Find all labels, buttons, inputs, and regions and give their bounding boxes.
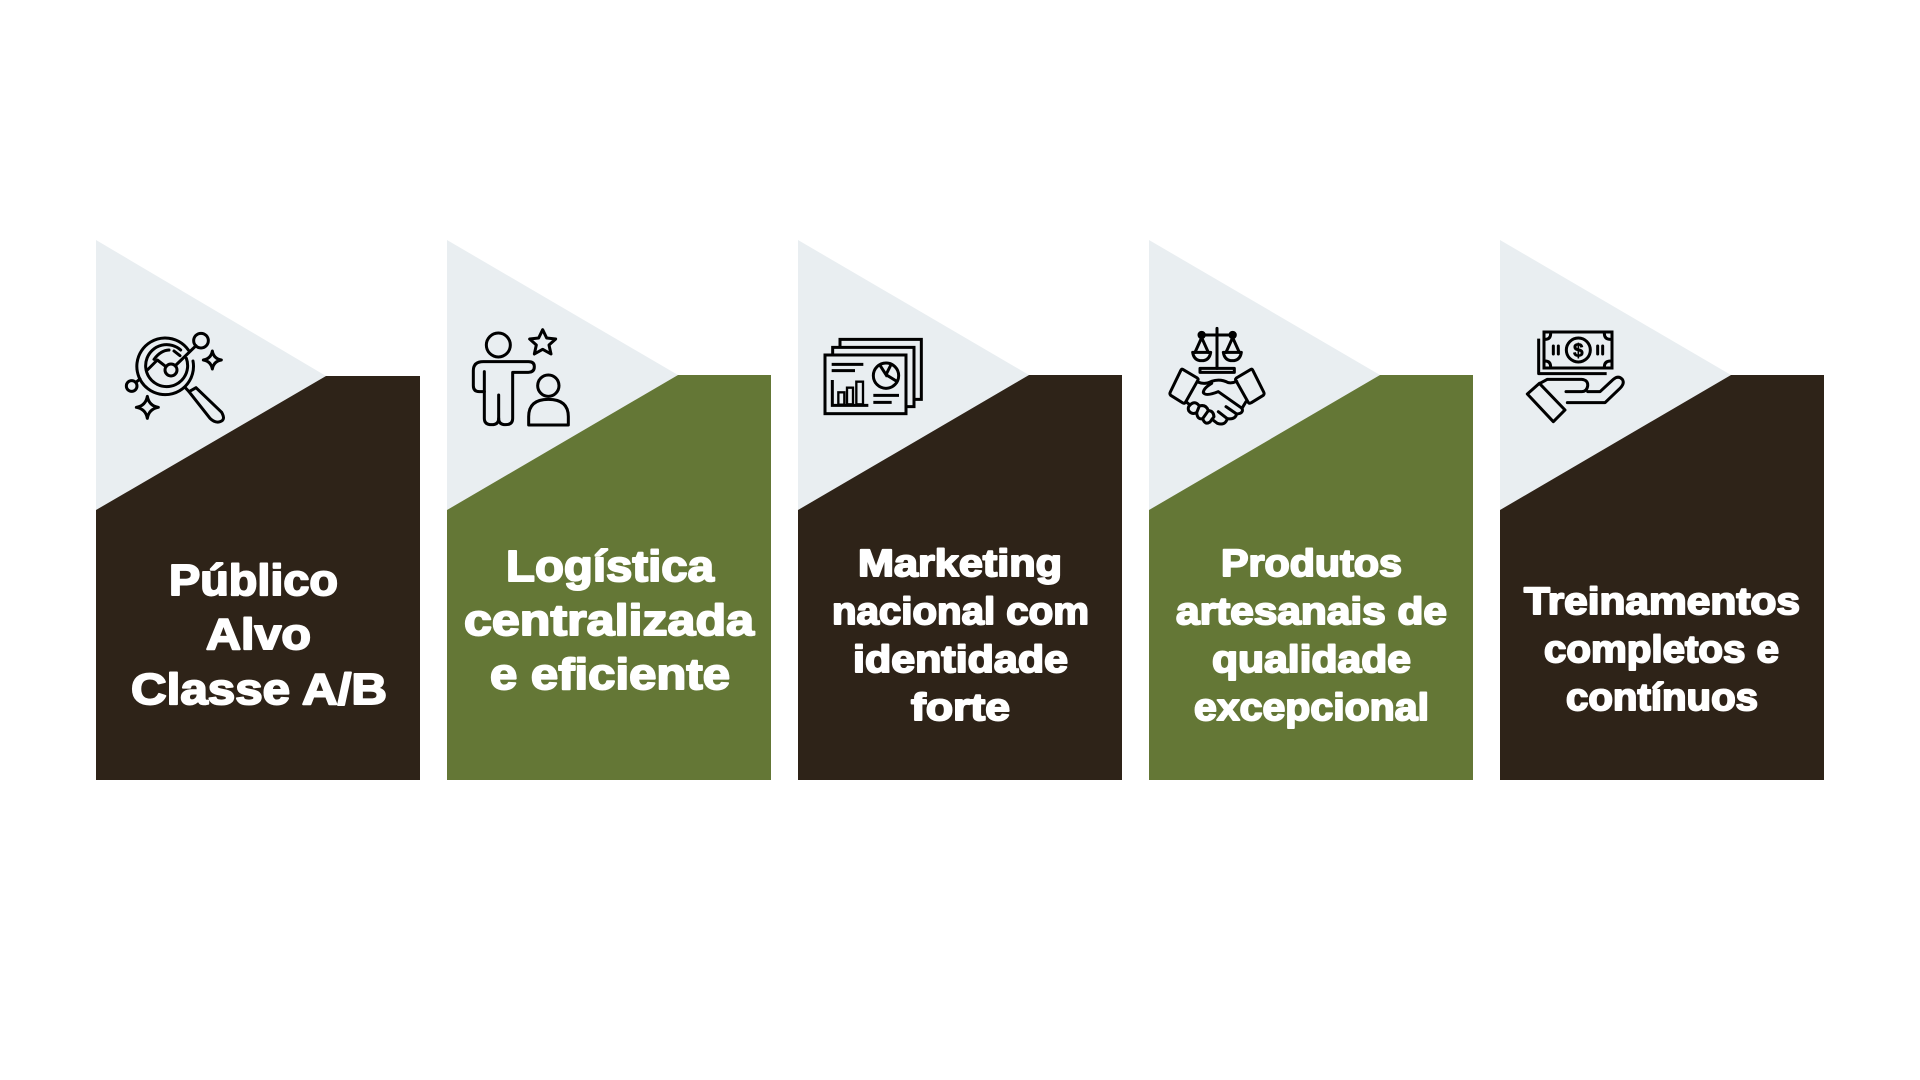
text: Logística centralizada e eficiente: e eficiente: [490, 650, 730, 699]
icon: scales and handshake: [1170, 328, 1264, 424]
text: Treinamentos completos e contínuos: completos e: [1544, 629, 1779, 671]
text: Marketing nacional com identidade forte: identidade: [853, 639, 1068, 681]
icon: person pointing with star: [473, 330, 568, 425]
text: Logística centralizada e eficiente: Logística: [506, 542, 715, 591]
icon: hand holding banknote: [1527, 332, 1623, 422]
light triangle: [96, 240, 326, 510]
icon: magnifying glass with chart: [126, 333, 223, 422]
text: Treinamentos completos e contínuos: Treinamentos: [1524, 581, 1800, 623]
text: Marketing nacional com identidade forte: forte: [911, 687, 1010, 729]
dark block: [1500, 375, 1824, 780]
text: Marketing nacional com identidade forte: Marketing: [858, 543, 1062, 585]
text: Logística centralizada e eficiente: [464, 542, 755, 699]
panel: Logística centralizada: [447, 240, 771, 780]
green block: [1149, 375, 1473, 780]
green block: [447, 375, 771, 780]
panel: Produtos artesanais: [1149, 240, 1473, 780]
text: Produtos artesanais de qualidade excepcional: Produtos: [1221, 543, 1402, 585]
text: Logística centralizada e eficiente: centralizada: [464, 596, 755, 645]
text: Público Alvo Classe A/B: Público: [169, 556, 338, 605]
light triangle: [1149, 240, 1380, 510]
text: Produtos artesanais de qualidade excepcional: [1176, 543, 1447, 729]
icon: presentation sheets with charts: [825, 339, 921, 414]
text: Público Alvo Classe A/B: Alvo: [206, 610, 311, 659]
dark block: [798, 375, 1122, 780]
panel: Marketing nacional: [798, 240, 1122, 780]
text: Treinamentos completos e contínuos: contínuos: [1566, 677, 1758, 719]
text: Público Alvo Classe A/B: Classe A/B: [131, 665, 387, 714]
panel: Público Alvo Classe A/B: [96, 240, 420, 780]
dark block: [96, 376, 420, 780]
icon: hand holding banknote: $: [1573, 340, 1584, 361]
text: Treinamentos completos e contínuos: [1524, 581, 1800, 719]
text: Produtos artesanais de qualidade excepcional: qualidade: [1212, 639, 1411, 681]
panel: Treinamentos: [1500, 240, 1824, 780]
text: Marketing nacional com identidade forte: nacional com: [832, 591, 1089, 633]
text: Produtos artesanais de qualidade excepcional: artesanais de: [1176, 591, 1447, 633]
text: Marketing nacional com identidade forte: [832, 543, 1089, 729]
text: Público Alvo Classe A/B: [131, 556, 387, 714]
text: Produtos artesanais de qualidade excepcional: excepcional: [1194, 687, 1429, 729]
light triangle: [798, 240, 1029, 510]
light triangle: [447, 240, 678, 510]
light triangle: [1500, 240, 1731, 510]
